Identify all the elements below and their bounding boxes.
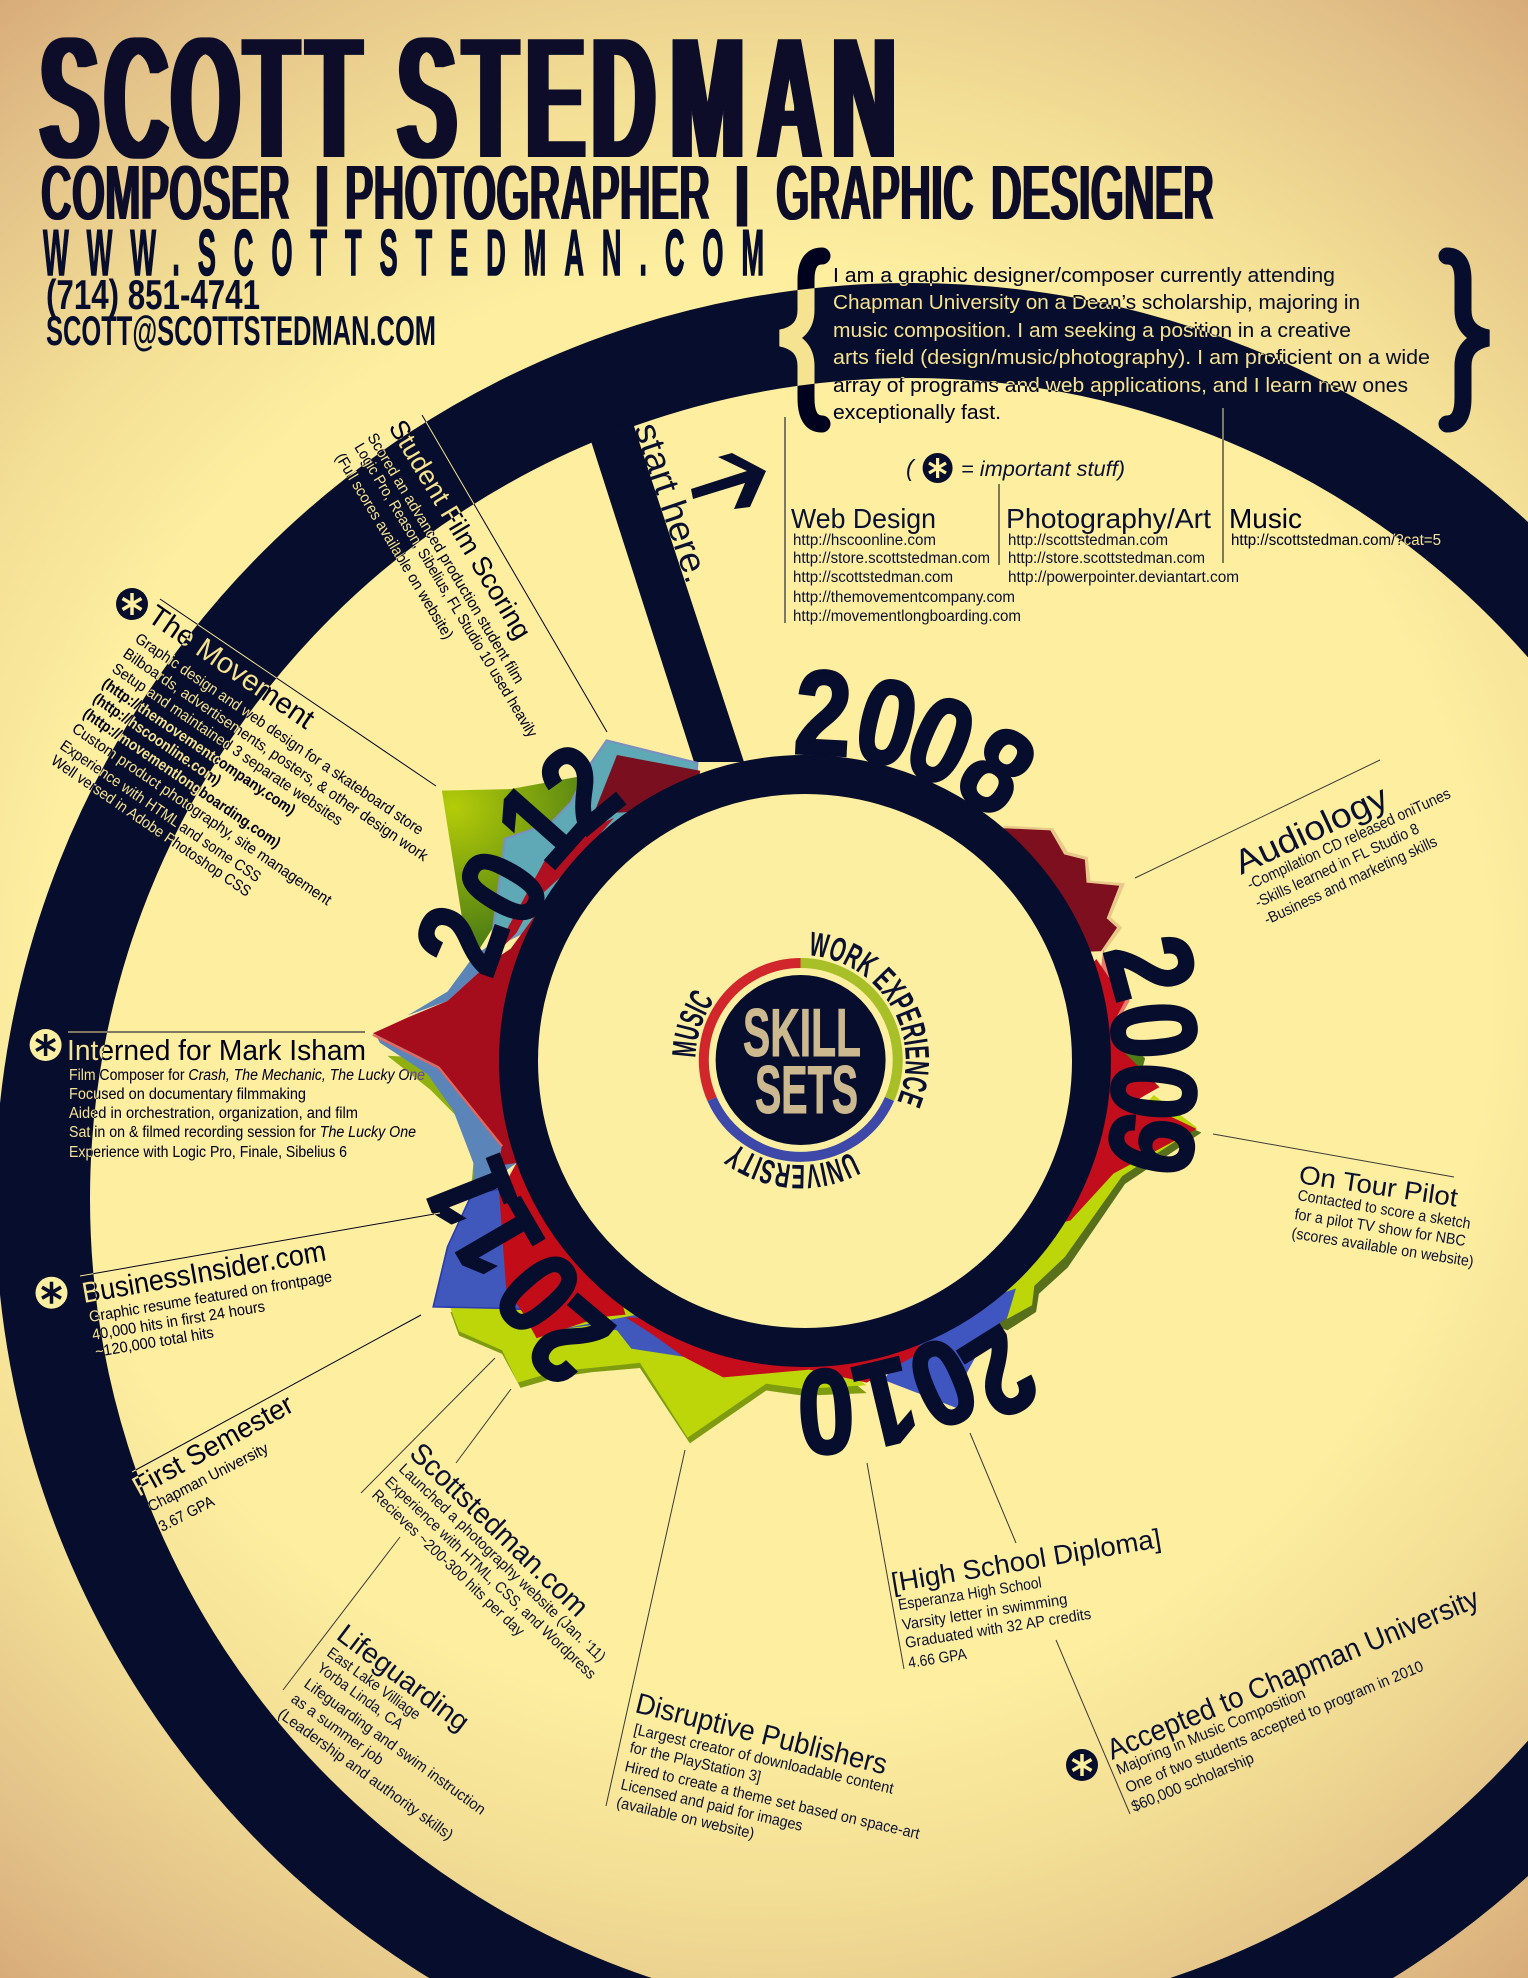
panel: high school diploma: [High School Diploma]	[889, 1523, 1163, 1598]
year label: 2011: 2	[504, 1272, 634, 1412]
subtitle: roles: DESIGNER	[991, 148, 1214, 237]
year label: 2010: 0	[890, 1310, 996, 1456]
year label: 2009: 0	[1085, 996, 1224, 1065]
links: web design: http://themovementcompany.com	[793, 589, 1015, 606]
panel: the movement: Graphic design and web design for a skateboard store	[132, 630, 426, 839]
icon: asterisk interned	[30, 1029, 62, 1061]
year label: 2012: 2	[515, 717, 644, 857]
panel: accepted to chapman university	[1056, 1582, 1484, 1816]
website: WWW.SCOTTSTEDMAN.COM	[43, 216, 764, 289]
skill area chart	[373, 740, 1201, 1443]
subtitle: roles: GRAPHIC	[776, 148, 974, 237]
subtitle: roles: |	[733, 153, 751, 229]
panel: student film scoring: (Full scores available on website)	[332, 450, 456, 642]
subtitle: roles	[41, 148, 1214, 237]
links: web design: http://hscoonline.com	[793, 532, 936, 549]
year label: 2010: 1	[843, 1331, 930, 1475]
links: photography and art: http://store.scottstedman.com	[1008, 550, 1205, 567]
phone: (714) 851-4741	[46, 271, 260, 318]
panel: disruptive publishers: Disruptive Publishers	[632, 1688, 890, 1781]
panel: the movement: (http://movementlongboarding.com)	[80, 705, 283, 852]
intro paragraph with left brace	[781, 256, 1430, 424]
year label: 2008: 2	[791, 644, 855, 782]
year label: 2011	[397, 1142, 634, 1412]
panel: on tour pilot: Contacted to score a sketch	[1296, 1187, 1472, 1233]
year label: 2010	[794, 1301, 1060, 1481]
panel: lifeguarding	[275, 1537, 489, 1844]
panel: interned for mark isham: Interned for Mark Isham	[67, 1035, 366, 1067]
panel: the movement	[48, 599, 436, 909]
subtitle: roles: |	[313, 153, 331, 229]
panel: audiology: -Compilation CD released oniTunes	[1245, 785, 1454, 894]
year label: 2010: 0	[794, 1343, 858, 1481]
panel: audiology: Audiology	[1228, 778, 1394, 882]
panel: the movement: Custom product photography, site management	[69, 720, 335, 909]
intro paragraph with left brace: arts field (design/music/photography). I am proficient on a wide	[833, 347, 1430, 369]
year label: 2009: 9	[1080, 1101, 1224, 1188]
title: SCOTT STEDMAN	[40, 0, 896, 197]
panel: lifeguarding: Lifeguarding and swim instruction	[301, 1675, 489, 1819]
center badge: skill sets: SETS	[755, 1052, 858, 1128]
panel: the movement: Bilboards, advertisements, posters, & other design work	[120, 645, 431, 865]
year label: 2008: 0	[889, 667, 994, 813]
year label: 2012: 1	[469, 758, 608, 890]
panel: audiology: -Skills learned in FL Studio 8	[1253, 821, 1422, 912]
panel: accepted to chapman university: $60,000 scholarship	[1129, 1750, 1257, 1816]
panel: disruptive publishers: [Largest creator of downloadable content	[632, 1721, 896, 1798]
center badge: skill sets: MUSIC	[672, 990, 712, 1057]
intro paragraph with left brace: exceptionally fast.	[833, 402, 1001, 424]
panel: interned for mark isham: Experience with Logic Pro, Finale, Sibelius 6	[69, 1144, 347, 1161]
panel: student film scoring: Scored an advanced production student film	[364, 430, 527, 687]
panel: businessinsider: Graphic resume featured on frontpage	[88, 1269, 333, 1326]
panel: student film scoring: Logic Pro, Reason, Sibelius, FL Studio 10 used heavily	[351, 440, 540, 741]
links: web design: http://store.scottstedman.com	[793, 550, 990, 567]
panel: disruptive publishers	[606, 1450, 922, 1843]
panel: disruptive publishers: Licensed and paid for images	[619, 1776, 804, 1835]
year label: 2009: 0	[1085, 1057, 1224, 1126]
skill wheel ring	[518, 774, 1092, 1348]
panel: audiology: -Business and marketing skills	[1262, 833, 1440, 929]
links: music	[1229, 503, 1441, 549]
links: web design: http://movementlongboarding.com	[793, 608, 1021, 625]
panel: the movement: (http://themovementcompany.com)	[99, 675, 298, 819]
panel: on tour pilot	[1213, 1134, 1475, 1271]
panel: interned for mark isham: Aided in orchestration, organization, and film	[69, 1105, 358, 1122]
panel: interned for mark isham: Sat in on & filmed recording session for The Lucky One	[69, 1124, 416, 1141]
panel: scottstedman.com: Experience with HTML, CSS, and Wordpress	[381, 1474, 599, 1683]
panel: student film scoring	[332, 415, 607, 741]
panel: first semester: Chapman University	[145, 1440, 272, 1516]
panel: the movement: Setup and maintained 3 separate websites	[109, 660, 346, 829]
links: music: http://scottstedman.com/?cat=5	[1231, 532, 1441, 549]
panel: scottstedman.com: Recieves ~200-300 hits per day	[368, 1487, 528, 1640]
legend: important stuff	[906, 453, 1125, 483]
legend: important stuff: (	[906, 455, 916, 481]
year label: 2011: 1	[397, 1142, 543, 1244]
panel: on tour pilot: (scores available on website)	[1290, 1225, 1475, 1271]
subtitle: roles: PHOTOGRAPHER	[345, 148, 710, 237]
legend: important stuff: = important stuff)	[961, 458, 1125, 481]
panel: disruptive publishers: (available on website)	[615, 1794, 756, 1843]
intro paragraph with left brace: music composition. I am seeking a position in a creative	[833, 320, 1351, 342]
panel: lifeguarding: (Leadership and authority skills)	[275, 1705, 456, 1844]
intro paragraph with left brace: I am a graphic designer/composer currently attending	[833, 265, 1335, 287]
panel: businessinsider: BusinessInsider.com	[80, 1235, 328, 1310]
icon: asterisk businessinsider	[36, 1277, 68, 1309]
panel: first semester: 3.67 GPA	[156, 1493, 218, 1536]
panel: businessinsider: ~120,000 total hits	[94, 1324, 215, 1361]
panel: businessinsider: 40,000 hits in first 24 hours	[91, 1298, 266, 1344]
links: photography and art: http://powerpointer.deviantart.com	[1008, 569, 1239, 586]
year label: 2010: 2	[941, 1301, 1060, 1446]
year label: 2008: 0	[844, 650, 930, 794]
panel: audiology	[1135, 760, 1454, 929]
panel: lifeguarding: East Lake Villiage	[324, 1644, 423, 1723]
year label: 2009: 2	[1079, 922, 1223, 1012]
panel: lifeguarding: Lifeguarding	[331, 1618, 475, 1737]
subtitle: roles: COMPOSER	[41, 148, 290, 237]
panel: student film scoring: Student Film Scoring	[383, 415, 537, 644]
panel: scottstedman.com	[361, 1358, 609, 1683]
icon: right brace	[1447, 256, 1488, 424]
links: web design	[791, 503, 1021, 625]
icon: asterisk accepted	[1066, 1749, 1098, 1781]
year label: 2011: 0	[469, 1227, 608, 1358]
panel: disruptive publishers: Hired to create a theme set based on space-art	[623, 1758, 922, 1843]
panel: the movement: Well versed in Adobe Photoshop CSS	[48, 752, 254, 900]
panel: the movement: The Movement	[142, 599, 320, 736]
panel: on tour pilot: On Tour Pilot	[1297, 1159, 1461, 1213]
year label: 2012: 0	[431, 829, 576, 945]
panel: high school diploma: Varsity letter in swimming	[901, 1591, 1069, 1634]
icon: asterisk the movement	[116, 588, 148, 620]
year label: 2012	[388, 717, 644, 989]
icon: arrow	[691, 453, 766, 509]
panel: accepted to chapman university: Accepted to Chapman University	[1102, 1582, 1484, 1766]
year label: 2012: 2	[388, 890, 534, 989]
intro paragraph with left brace: Chapman University on a Dean’s scholarship, majoring in	[833, 292, 1360, 314]
intro paragraph with left brace: array of programs and web applications, and I learn new ones	[833, 375, 1408, 397]
panel: interned for mark isham	[67, 1032, 425, 1161]
panel: the movement: (http://hscoonline.com)	[90, 690, 224, 789]
center badge: skill sets: WORK EXPERIENCE	[812, 932, 930, 1108]
panel: lifeguarding: as a summer job	[288, 1690, 387, 1769]
links: photography and art: Photography/Art	[1006, 503, 1211, 534]
panel: high school diploma: Graduated with 32 AP credits	[904, 1606, 1093, 1652]
panel: high school diploma	[867, 1433, 1163, 1672]
links: photography and art	[1006, 503, 1239, 586]
panel: on tour pilot: for a pilot TV show for NBC	[1293, 1206, 1467, 1250]
panel: scottstedman.com: Launched a photography website (Jan. ‘11)	[395, 1461, 609, 1666]
links: photography and art: http://scottstedman.com	[1008, 532, 1168, 549]
link dividers	[784, 417, 786, 623]
year label: 2011: 1	[424, 1182, 569, 1299]
panel: first semester: First Semester	[127, 1388, 298, 1502]
panel: businessinsider	[80, 1213, 440, 1361]
links: web design: Web Design	[791, 503, 936, 534]
start here label: start here.	[626, 417, 718, 588]
panel: accepted to chapman university: One of two students accepted to program in 2010	[1123, 1658, 1426, 1797]
center badge: skill sets: UNIVERSITY	[724, 1146, 860, 1188]
panel: scottstedman.com: Scottstedman.com	[403, 1437, 594, 1623]
year label: 2008: 8	[937, 699, 1058, 842]
panel: high school diploma: 4.66 GPA	[907, 1646, 968, 1672]
panel: interned for mark isham: Focused on documentary filmmaking	[69, 1086, 306, 1103]
center badge: skill sets	[672, 932, 930, 1188]
panel: disruptive publishers: for the PlayStation 3]	[628, 1739, 762, 1786]
panel: interned for mark isham: Film Composer for Crash, The Mechanic, The Lucky One	[69, 1067, 425, 1084]
panel: accepted to chapman university: Majoring in Music Composition	[1114, 1685, 1308, 1779]
panel: the movement: Experience with HTML and some CSS	[57, 737, 264, 886]
panel: first semester	[127, 1315, 421, 1536]
panel: high school diploma: Esperanza High School	[897, 1574, 1043, 1614]
email: SCOTT@SCOTTSTEDMAN.COM	[46, 307, 436, 354]
center badge: skill sets: SKILL	[743, 995, 861, 1071]
spoke from outer ring to skill wheel	[590, 420, 744, 762]
year label: 2008	[791, 644, 1058, 842]
links: web design: http://scottstedman.com	[793, 569, 953, 586]
panel: lifeguarding: Yorba Linda, CA	[314, 1659, 407, 1734]
year label: 2009	[1079, 922, 1224, 1188]
links: music: Music	[1229, 503, 1302, 534]
